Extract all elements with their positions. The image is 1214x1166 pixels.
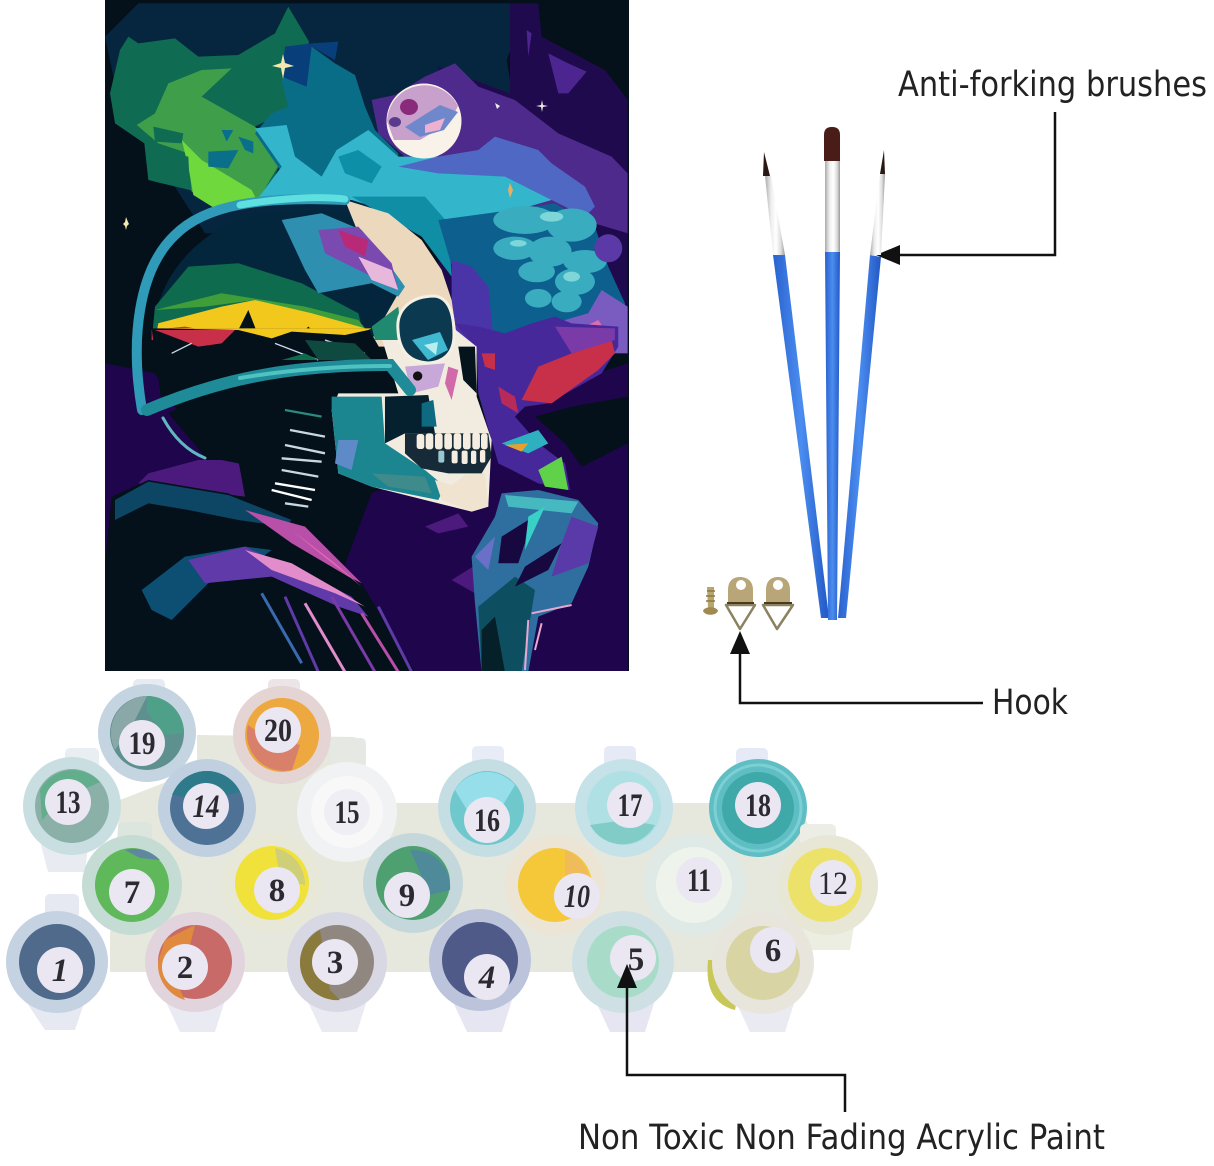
pot 2: 2: [177, 950, 193, 986]
pot 12: [778, 824, 878, 950]
skull cranium: [345, 200, 458, 347]
pot 14: 14: [192, 789, 220, 825]
pot 7: [82, 822, 182, 935]
pot 9: [363, 833, 463, 933]
moon: [386, 84, 462, 158]
pot 18: [709, 748, 807, 857]
night sky: [105, 3, 628, 340]
hood and shoulders: [105, 480, 415, 672]
green cloud: [110, 7, 309, 212]
pot 15: [297, 738, 397, 862]
pot 4: [429, 909, 531, 1032]
purple and red smoke: [455, 317, 618, 490]
pot 6: [707, 912, 814, 1032]
arrow: to brushes: [876, 112, 1055, 265]
helmet rim: [137, 198, 410, 458]
pot 10: 10: [564, 879, 590, 915]
pot 19: [98, 679, 196, 782]
pot 9: 9: [399, 878, 415, 914]
pot 20: [233, 679, 331, 784]
brush: left: [763, 152, 829, 618]
pot 14: [158, 759, 256, 857]
acrylic paint label: Non Toxic Non Fading Acrylic Paint: [578, 1118, 1105, 1158]
pot 6: 6: [765, 933, 781, 969]
pot 20: 20: [264, 713, 292, 749]
pot 2: [145, 912, 245, 1032]
arrow: to hook: [730, 631, 983, 703]
pot 17: [575, 746, 673, 857]
pot 13: [23, 748, 121, 872]
icon: hook left: [726, 577, 755, 629]
pot 3: 3: [327, 945, 343, 981]
painting: skull with galaxy helmet: [105, 0, 629, 672]
pot 5: [572, 911, 674, 1032]
neck vertebrae: [168, 408, 382, 508]
pot 13: 13: [56, 785, 80, 821]
brush: middle: [824, 127, 840, 620]
pot 7: 7: [124, 875, 140, 911]
pot 4: 4: [478, 960, 495, 996]
pot 5: 5: [628, 942, 644, 978]
pot 11: 11: [687, 863, 711, 899]
pot 3: [287, 912, 387, 1032]
paint pots: [6, 679, 878, 1032]
pot 1: 1: [52, 953, 68, 989]
galaxy helmet dome: [137, 198, 410, 458]
bubble cloud: [438, 203, 628, 353]
stars: [123, 54, 548, 230]
icon: hook right: [763, 577, 793, 629]
hook label: Hook: [992, 683, 1069, 723]
skull face and jaw: [332, 327, 492, 512]
pot 8: 8: [269, 873, 285, 909]
pot 11: [643, 834, 745, 936]
paint pot tray: [110, 735, 830, 972]
pot 19: 19: [128, 726, 156, 762]
pot 15: 15: [334, 795, 360, 831]
pot 12: 12: [818, 866, 848, 902]
pot 8: [222, 833, 322, 933]
pot 17: 17: [618, 788, 642, 824]
pot 10: [505, 835, 605, 935]
pot 1: [6, 894, 108, 1030]
brush: right: [838, 150, 885, 618]
smoke hand: [472, 490, 598, 672]
pot 16: [438, 746, 536, 857]
skull eye socket: [398, 296, 454, 363]
icon: screw: [703, 587, 718, 615]
pot 16: 16: [474, 803, 500, 839]
arrow: to acrylic paint: [617, 964, 845, 1112]
teal smoke cloud: [255, 42, 595, 277]
pot 18: 18: [745, 788, 771, 824]
